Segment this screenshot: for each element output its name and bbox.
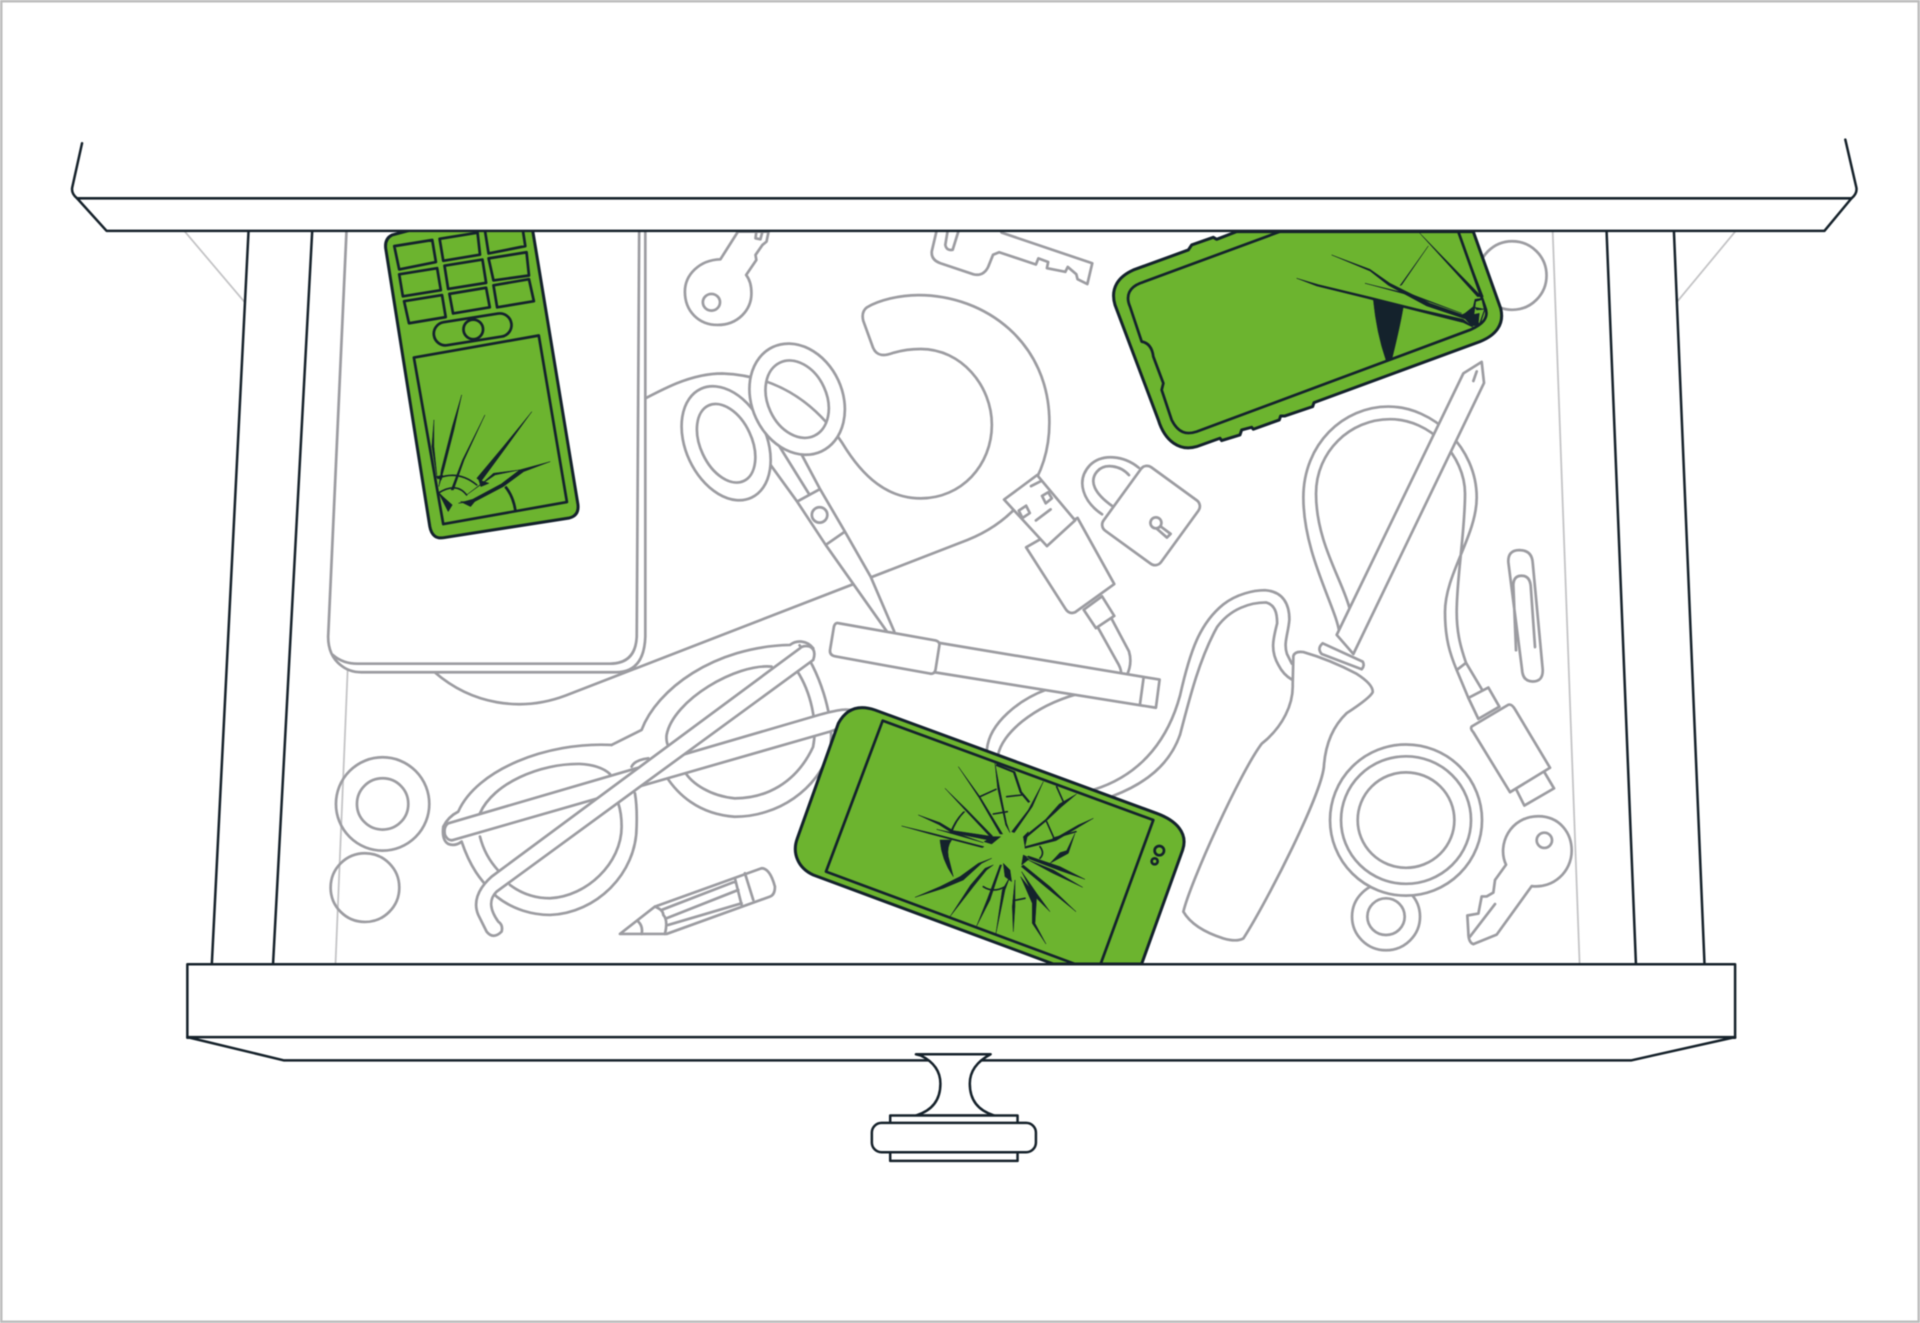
glasses — [443, 642, 860, 936]
drawer interior walls — [184, 230, 1736, 964]
smartphone cracks — [1373, 299, 1403, 360]
smartphone screen outline — [1128, 232, 1486, 433]
usb cable and connector — [987, 475, 1130, 756]
scissors handle right — [732, 328, 863, 470]
keypad keys — [394, 230, 534, 323]
usb-c connector — [1468, 688, 1499, 719]
circle: washer top right — [1478, 241, 1547, 310]
keypad phone cracks — [432, 395, 550, 512]
smartphone screen outline — [826, 721, 1153, 964]
cabinet top panel — [0, 0, 1920, 231]
camera and sensor — [1155, 846, 1164, 855]
screwdriver handle — [1183, 652, 1373, 940]
screwdriver collar — [1319, 643, 1364, 669]
scissors blades — [751, 400, 894, 632]
left lens — [443, 745, 648, 915]
scissors handle left — [664, 372, 788, 515]
key: top center — [932, 230, 1092, 284]
screwdriver shaft — [1337, 362, 1484, 654]
key: top — [685, 232, 769, 325]
small ring — [1352, 883, 1420, 950]
temple arm horizontal — [445, 710, 860, 840]
right side tools — [1183, 362, 1572, 950]
usb-c cable — [1303, 407, 1482, 698]
phone: keypad, cracked — [386, 230, 578, 538]
pencil — [620, 868, 775, 934]
temple arm diagonal — [476, 646, 814, 936]
home button — [432, 312, 513, 347]
shattered glass cracks — [902, 763, 1093, 944]
right lens — [666, 645, 831, 817]
drawer knob — [872, 1054, 1036, 1161]
phone: smartphone top right, cracked — [1114, 232, 1502, 448]
cable loop by screwdriver handle — [1093, 590, 1292, 796]
tape roll — [1330, 744, 1482, 896]
tablet — [328, 230, 645, 672]
large cable behind tablet — [435, 295, 1049, 704]
keypad phone screen — [414, 336, 567, 524]
drawer front panel — [187, 964, 1735, 1060]
padlock — [1082, 457, 1203, 568]
circles: tape rolls left — [331, 757, 429, 922]
key bottom right — [1467, 816, 1572, 944]
paperclip — [1508, 550, 1543, 681]
marker pen — [830, 623, 1160, 708]
scissors — [664, 328, 894, 632]
phone: smartphone bottom centre, shattered — [795, 708, 1184, 964]
